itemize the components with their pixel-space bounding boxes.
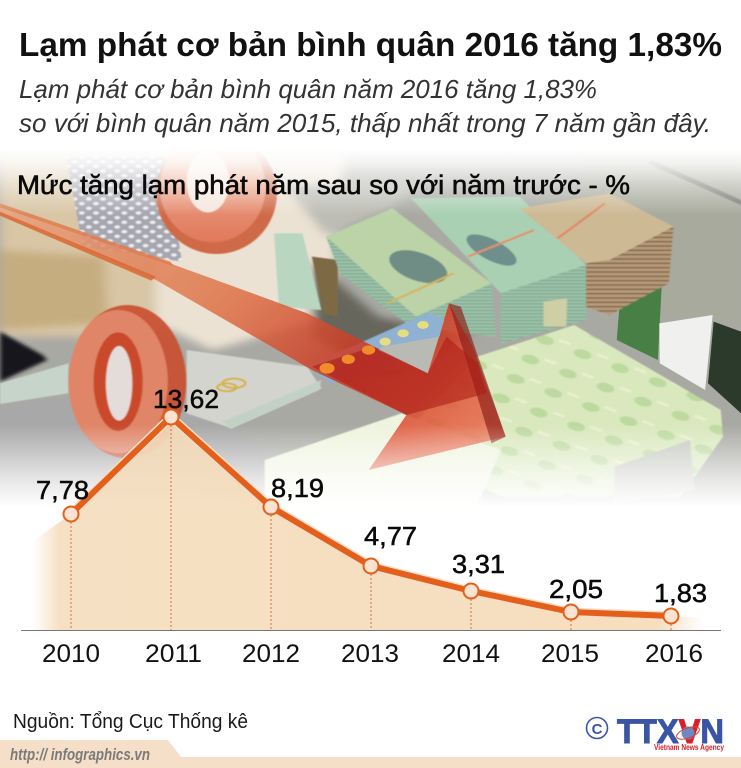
- year labels: 2011: [145, 640, 202, 668]
- subtitle: Lạm phát cơ bản bình quân năm 2016 tăng 1,83%: [19, 74, 597, 104]
- year labels: [42, 640, 703, 668]
- subtitle: so với bình quân năm 2015, thấp nhất trong 7 năm gần đây.: [19, 108, 711, 138]
- chart heading: Mức tăng lạm phát năm sau so với năm trước - %: [17, 170, 630, 200]
- copyright icon: C: [592, 721, 603, 738]
- year labels: 2013: [341, 640, 399, 668]
- year labels: 2010: [42, 640, 100, 668]
- data point markers: [64, 410, 678, 624]
- title: Lạm phát cơ bản bình quân 2016 tăng 1,83%: [19, 27, 722, 64]
- trend line: [71, 417, 671, 616]
- value labels: 3,31: [452, 549, 505, 579]
- value labels: 2,05: [549, 574, 603, 604]
- value labels: 8,19: [271, 473, 324, 503]
- logo: TTXVN: [586, 713, 724, 752]
- logo tagline: Vietnam News Agency: [654, 743, 724, 752]
- year labels: 2012: [242, 640, 300, 668]
- money stacks: [326, 193, 673, 343]
- front banknotes: [264, 324, 724, 496]
- website url: http:// infographics.vn: [10, 745, 150, 764]
- logo wordmark: TTXVN: [617, 713, 724, 751]
- value labels: 1,83: [654, 578, 707, 608]
- chart area fill: [33, 417, 704, 630]
- orange plate with dots: [307, 312, 444, 383]
- line chart: inflation by year: [21, 384, 721, 668]
- polka dot cloth: [66, 157, 182, 262]
- value labels: 4,77: [364, 521, 417, 551]
- arrow: [0, 207, 506, 470]
- source note: Nguồn: Tổng Cục Thống kê: [13, 711, 248, 733]
- background photo: money and falling arrow: [0, 154, 741, 498]
- footer band: [0, 740, 741, 768]
- axis baseline: [21, 630, 721, 632]
- lower percent zero: [69, 305, 186, 458]
- value labels: 7,78: [36, 475, 89, 505]
- value labels: [36, 384, 707, 608]
- dotted drop lines: [71, 417, 671, 630]
- year labels: 2015: [541, 640, 599, 668]
- logo globe: [675, 724, 701, 742]
- upper percent zero: [155, 155, 278, 255]
- year labels: 2014: [442, 640, 500, 668]
- value labels: 13,62: [153, 384, 219, 414]
- subtitle: [19, 74, 711, 138]
- year labels: 2016: [645, 640, 703, 668]
